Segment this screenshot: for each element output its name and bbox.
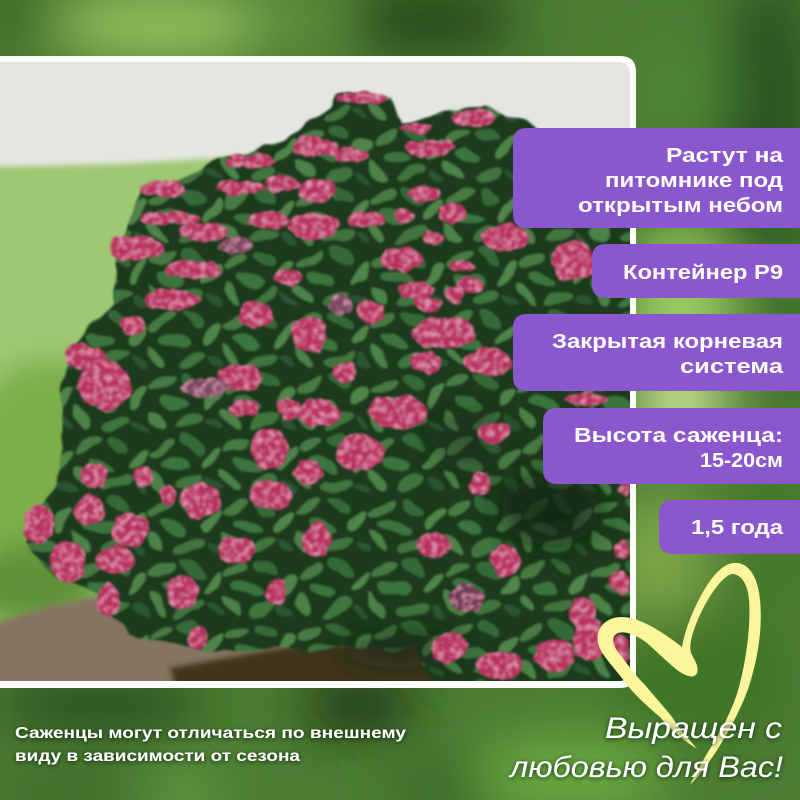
badge: grown outdoors in nursery: Растут на — [666, 145, 784, 167]
badge: closed root system — [513, 314, 800, 391]
slogan: grown with love for you: Выращен с — [605, 712, 782, 745]
bush foliage — [28, 95, 660, 700]
ground mulch — [0, 594, 624, 681]
badge: closed root system: Закрытая корневая — [552, 331, 783, 353]
icon: hand-drawn yellow heart — [598, 563, 761, 785]
photo card — [0, 56, 660, 700]
badge: grown outdoors in nursery: питомнике под — [605, 170, 783, 192]
slogan: grown with love for you: любовью для Вас! — [508, 751, 784, 784]
dark shadows inside the bush — [340, 410, 600, 668]
photo of flowering spirea bush — [0, 62, 660, 700]
grass lawn — [0, 152, 249, 626]
badge: age 1.5 years: 1,5 года — [691, 517, 784, 539]
badge: age 1.5 years — [659, 500, 800, 554]
badge: seedling height: 15-20см — [700, 450, 783, 472]
note: appearance may vary by season: виду в зависимости от сезона — [15, 748, 300, 765]
badge: container P9: Контейнер Р9 — [623, 262, 783, 284]
badge: closed root system: система — [680, 356, 784, 378]
pavement — [0, 62, 630, 172]
badge: grown outdoors in nursery: открытым небом — [578, 195, 783, 217]
badge: seedling height: Высота саженца: — [574, 425, 783, 447]
pink flower clusters — [24, 92, 631, 681]
badge: container P9 — [592, 244, 800, 298]
white frame — [0, 56, 636, 688]
note: appearance may vary by season: Саженцы могут отличаться по внешнему — [15, 725, 406, 742]
note: appearance may vary by season — [15, 725, 406, 765]
badge: grown outdoors in nursery — [513, 128, 800, 228]
badge: seedling height — [543, 408, 800, 484]
slogan: grown with love for you — [508, 712, 784, 784]
